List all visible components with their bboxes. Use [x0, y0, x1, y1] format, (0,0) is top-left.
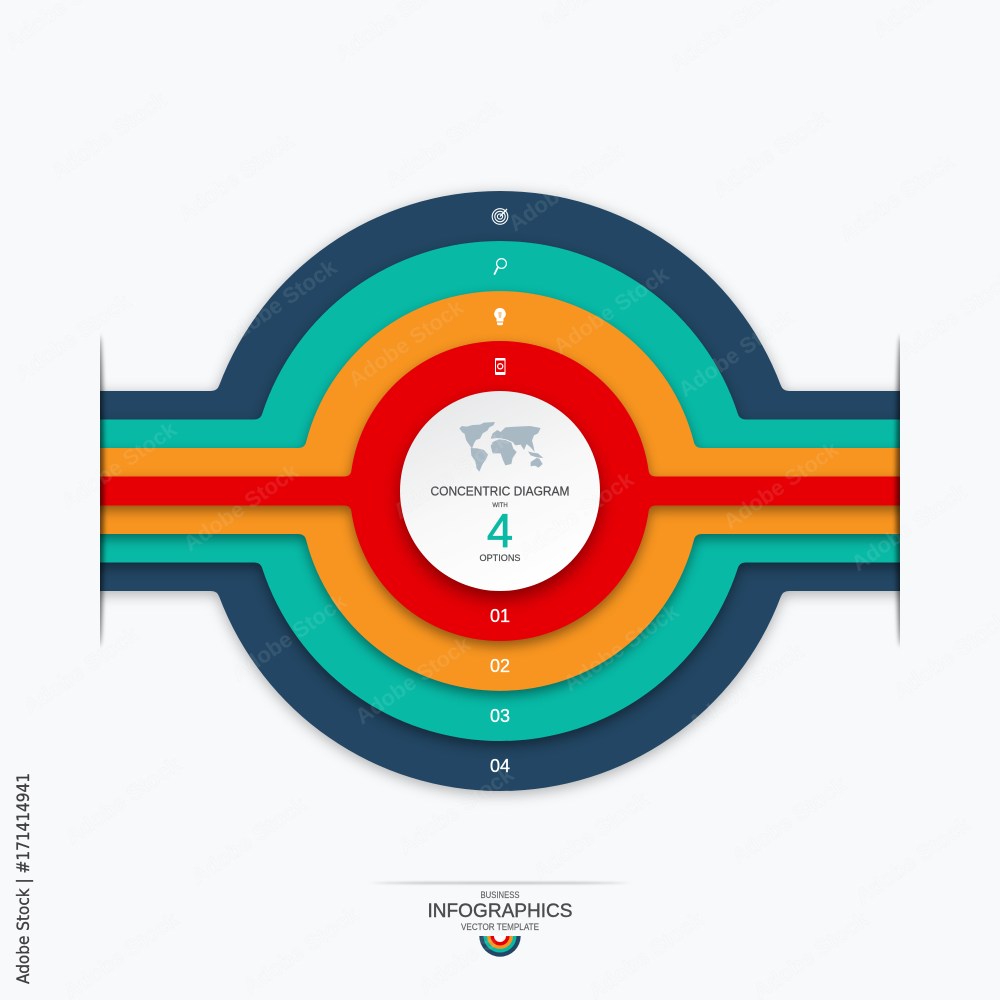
watermark: Adobe Stock [227, 588, 352, 686]
watermark: Adobe Stock [344, 294, 469, 392]
band 03: teal [90, 241, 910, 741]
watermark: Adobe Stock [179, 458, 304, 556]
watermark: Adobe Stock [847, 478, 972, 576]
watermark: Adobe Stock [514, 466, 639, 564]
watermark: Adobe Stock [529, 786, 654, 884]
footer: vector template: VECTOR TEMPLATE [461, 922, 539, 932]
icon: smartphone [495, 358, 506, 375]
footer: business: BUSINESS [480, 890, 520, 900]
watermark: Adobe Stock [709, 104, 834, 202]
watermark: Adobe Stock [19, 621, 144, 719]
watermark: Adobe Stock [674, 304, 799, 402]
big number 4: 4 [487, 504, 513, 557]
watermark: Adobe Stock [394, 761, 519, 859]
watermark: Adobe Stock [835, 148, 960, 246]
watermark: Adobe Stock [719, 436, 844, 534]
band 02: orange [90, 291, 910, 691]
band 01: red [90, 341, 910, 641]
watermark: Adobe Stock [239, 901, 364, 999]
footer: infographics: INFOGRAPHICS [428, 901, 572, 922]
watermark: Adobe Stock [727, 771, 852, 869]
watermark: Adobe Stock [174, 128, 299, 226]
watermark: Adobe Stock [549, 261, 674, 359]
center white circle [400, 391, 600, 591]
stock credit: Adobe Stock | #171414941 [14, 773, 34, 984]
icon: magnifier [494, 259, 506, 274]
watermark: Adobe Stock [851, 811, 976, 909]
watermark: Adobe Stock [47, 86, 172, 184]
watermark: Adobe Stock [351, 631, 476, 729]
icon: target [492, 209, 508, 224]
watermark: Adobe Stock [684, 638, 809, 736]
footer: mini concentric logo [479, 936, 521, 957]
watermark: Adobe Stock [11, 288, 136, 386]
watermark: Adobe Stock [217, 254, 342, 352]
right slit shadow [892, 334, 900, 648]
with label: WITH [492, 503, 508, 509]
watermark: Adobe Stock [389, 426, 514, 524]
watermark: Adobe Stock [381, 94, 506, 192]
watermark: Adobe Stock [187, 791, 312, 889]
concentric diagram [90, 191, 910, 791]
world map [459, 422, 543, 472]
band 04: navy [90, 191, 910, 791]
watermark: Adobe Stock [414, 901, 539, 999]
watermark: Adobe Stock [61, 751, 186, 849]
number 03: 03 [490, 706, 510, 726]
watermark: Adobe Stock [504, 138, 629, 236]
number 02: 02 [490, 656, 510, 676]
watermark: Adobe Stock [57, 416, 182, 514]
number 04: 04 [490, 756, 510, 776]
watermark: Adobe Stock [559, 598, 684, 696]
center title: CONCENTRIC DIAGRAM [430, 484, 570, 498]
number 01: 01 [490, 606, 510, 626]
options label: OPTIONS [480, 553, 520, 563]
left slit shadow [100, 334, 108, 648]
footer shadow line [375, 882, 625, 884]
icon: light bulb [494, 308, 506, 325]
